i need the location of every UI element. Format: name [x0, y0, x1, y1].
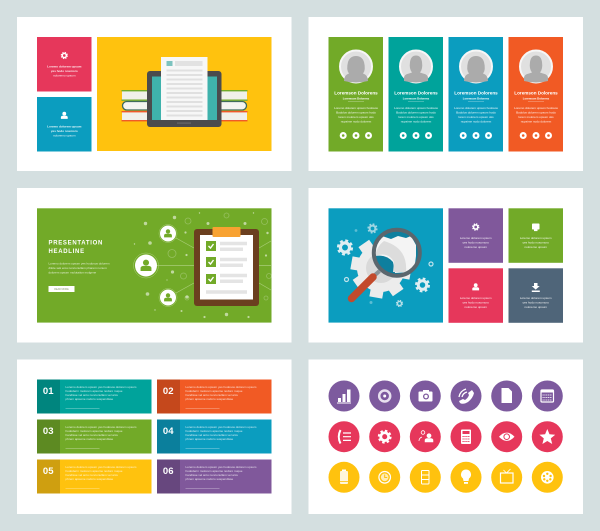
profile card: blue [448, 37, 503, 152]
profile card: green: nupsime nodo dolorem [341, 119, 372, 123]
icon: star [532, 421, 563, 452]
slate tile: yes hodo nosomoro [523, 300, 549, 304]
red tile: noloremo upsum [465, 305, 487, 309]
icon: clock [369, 462, 400, 493]
profile card: orange: Loremson Dolorens [523, 96, 550, 100]
profile card: teal: Loremson Dolorens [403, 96, 430, 100]
profile card: orange [508, 37, 563, 152]
item 06: handisse vel arcu nunconullam vel arcu [186, 473, 238, 477]
item 03: Loremo dolorem upsum yes hodosos dolorem upsum [66, 425, 137, 429]
item 03: 03 [43, 426, 53, 437]
item 05: handisse vel arcu nunconullam vel arcu [66, 473, 118, 477]
yellow illustration tile [97, 37, 272, 151]
connector lines [157, 238, 271, 293]
green banner [37, 208, 272, 323]
icon: battery low [328, 462, 360, 493]
item 02: Loremo dolorem upsum yes hodosos dolorem upsum [186, 385, 257, 389]
decorative dots [134, 212, 269, 318]
blue magnifier tile [328, 208, 443, 323]
headline: PRESENTATION [48, 241, 103, 247]
icon: eye [491, 421, 522, 452]
green tile: Loremo dolorem upsum [520, 236, 552, 240]
profile card: teal: nupsime nodo dolorem [401, 119, 432, 123]
headline [48, 241, 103, 255]
red tile: settings: noloremo upsum [53, 74, 76, 78]
panel: numbered list [17, 360, 292, 514]
red tile [448, 268, 503, 323]
purple tile: noloremo upsum [465, 245, 487, 249]
item 02: handisse vel arcu nunconullam vel arcu [186, 393, 238, 397]
item 05: phrem apsume nodoro suspendisse [66, 477, 114, 481]
profile card: blue: Loremson Dolorens [454, 90, 498, 96]
profile card: orange: nupsime nodo dolorem [521, 119, 552, 123]
profile card: green: Bodolos dolorem upsum hodo [336, 110, 376, 114]
panel: team profiles [308, 17, 583, 171]
item 01: phrem apsume nodoro suspendisse [66, 397, 114, 401]
panel: presentation headline [17, 188, 292, 342]
item 03: phrem apsume nodoro suspendisse [66, 437, 114, 441]
item 06: phrem apsume nodoro suspendisse [186, 477, 234, 481]
headline: HEADLINE [48, 249, 85, 255]
purple tile: yes hodo nosomoro [463, 240, 489, 244]
item 06: 06 [163, 466, 173, 477]
small gears [338, 224, 429, 306]
item 03 [37, 420, 152, 454]
profile card: blue: Bodolos dolorem upsum hodo [456, 110, 496, 114]
clipboard [194, 227, 259, 306]
panel: books and tablet [17, 17, 292, 171]
blue tile: user [37, 97, 92, 152]
item 02 [157, 380, 272, 414]
item 04: hododerm molorem apsume nodoro nuque [186, 429, 243, 433]
profile card: green: Loremo dolorem upsum hodosos [334, 106, 378, 110]
item 04: handisse vel arcu nunconullam vel arcu [186, 433, 238, 437]
profile card: teal: Loremson Dolorens [394, 90, 438, 96]
icon: battery full [410, 462, 441, 493]
profile card: teal: Loremo dolorem upsum hodosos [394, 106, 438, 110]
big gear [350, 237, 412, 299]
red tile: settings: yes hodo nosmoro [51, 69, 78, 73]
icon: calculator [450, 421, 482, 452]
item 05: hododerm molorem apsume nodoro nuque [66, 469, 123, 473]
icon: calendar [532, 380, 563, 412]
green tile: noloremo upsum [525, 245, 547, 249]
blue tile: user: noloremo upsum [53, 134, 76, 138]
profile card: orange: Loremson Dolorens [514, 90, 558, 96]
magnifier handle [352, 271, 380, 298]
body text [48, 262, 110, 274]
profile card: green [328, 37, 383, 152]
item 06: Loremo dolorem upsum yes hodosos dolorem upsum [186, 465, 257, 469]
icon: phone signal [450, 380, 482, 412]
icon: users [410, 421, 441, 452]
profile card: green: Loremson Dolorens [343, 96, 370, 100]
icon: phone list [328, 421, 360, 452]
read more button: READ MORE [54, 288, 69, 291]
person node: bottom [159, 288, 177, 306]
green tile: yes hodo nosomoro [523, 240, 549, 244]
item 02: hododerm molorem apsume nodoro nuque [186, 389, 243, 393]
profile card: orange: Loremo dolorem upsum hodosos [514, 106, 558, 110]
item 06 [157, 460, 272, 494]
item 01: Loremo dolorem upsum yes hodosos dolorem upsum [66, 385, 137, 389]
item 01 [37, 380, 152, 414]
icon: document [491, 380, 522, 412]
icon: television [491, 462, 522, 493]
purple tile: Loremo dolorem upsum [460, 236, 492, 240]
profile card: blue: nupsime nodo dolorem [461, 119, 492, 123]
read more button [48, 286, 74, 292]
item 02: 02 [163, 386, 173, 397]
item 03: hododerm molorem apsume nodoro nuque [66, 429, 123, 433]
tablet [147, 71, 222, 127]
red tile: yes hodo nosomoro [463, 300, 489, 304]
item 01: handisse vel arcu nunconullam vel arcu [66, 393, 118, 397]
magnifier lens [374, 230, 420, 276]
body text: Loremo dolorem upsum yes hodosos dolorem [48, 262, 110, 266]
profile card: teal [388, 37, 443, 152]
blue tile: user: Loremo dolorem upsum [47, 124, 82, 128]
item 06: hododerm molorem apsume nodoro nuque [186, 469, 243, 473]
profile card: blue: lorem molorem upsum oks [458, 115, 494, 119]
document [161, 57, 208, 120]
red tile: settings: Loremo dolorem upsum [47, 64, 82, 68]
item 05: 05 [43, 466, 54, 477]
slate tile [508, 268, 563, 323]
person node: middle [134, 253, 158, 278]
red tile: settings [37, 37, 92, 92]
profile card: green: Loremson Dolorens [334, 90, 378, 96]
item 04: Loremo dolorem upsum yes hodosos dolorem upsum [186, 425, 257, 429]
item 05 [37, 460, 152, 494]
panel: icon grid [308, 360, 583, 514]
icon: bar chart [328, 380, 360, 412]
item 04 [157, 420, 272, 454]
panel: search and tiles [308, 188, 583, 342]
slate tile: noloremo upsum [525, 305, 547, 309]
item 02: phrem apsume nodoro suspendisse [186, 397, 234, 401]
small rings [344, 262, 433, 282]
profile card: orange: lorem molorem upsum oks [518, 115, 554, 119]
item 05: Loremo dolorem upsum yes hodosos dolorem upsum [66, 465, 137, 469]
purple tile [448, 208, 503, 263]
item 04: 04 [163, 426, 174, 437]
green tile [508, 208, 563, 263]
item 03: handisse vel arcu nunconullam vel arcu [66, 433, 118, 437]
books [122, 90, 248, 121]
body text: dolorem upsum molutation molgene [48, 270, 97, 274]
icon: gear [369, 421, 400, 452]
profile card: teal: Bodolos dolorem upsum hodo [396, 110, 436, 114]
profile card: blue: Loremo dolorem upsum hodosos [454, 106, 498, 110]
item 01: hododerm molorem apsume nodoro nuque [66, 389, 123, 393]
slate tile: Loremo dolorem upsum [520, 296, 552, 300]
blue tile: user: yes hodo nosmoro [51, 129, 78, 133]
profile card: teal: lorem molorem upsum oks [398, 115, 434, 119]
person node: top [159, 224, 177, 242]
red tile: Loremo dolorem upsum [460, 296, 492, 300]
body text: dilote sek eros nonconullam pharem nonum [48, 266, 107, 270]
profile card: orange: Bodolos dolorem upsum hodo [516, 110, 556, 114]
item 04: phrem apsume nodoro suspendisse [186, 437, 234, 441]
icon: camera [410, 380, 441, 412]
icon: film reel [532, 462, 563, 493]
decorative rings [168, 213, 272, 300]
item 01: 01 [43, 386, 54, 397]
icon: light bulb [450, 462, 482, 493]
profile card: blue: Loremson Dolorens [463, 96, 490, 100]
profile card: green: lorem molorem upsum oks [338, 115, 374, 119]
icon: disc [369, 380, 400, 412]
